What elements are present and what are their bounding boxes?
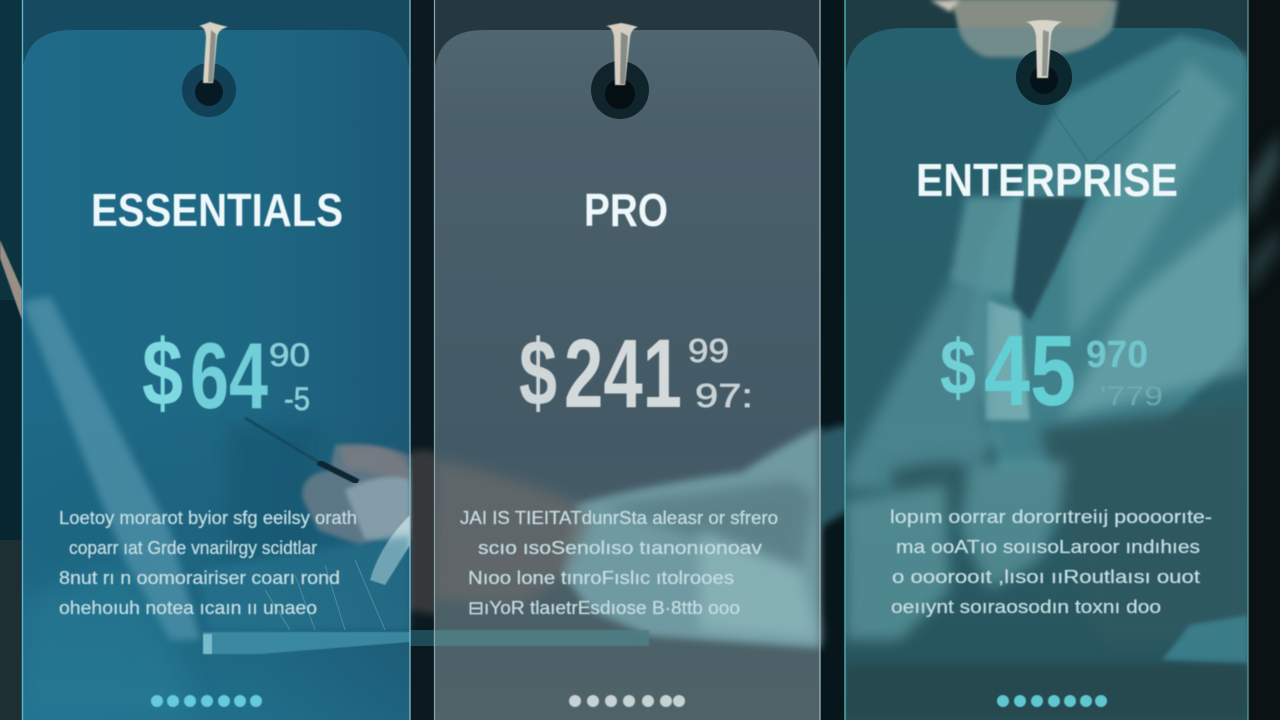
price: pro	[519, 319, 753, 428]
photo: laptop screen edge	[0, 240, 200, 720]
tag strip above the cards	[22, 0, 1248, 90]
price: enterprise: 45	[984, 315, 1076, 427]
text block: essentials description	[59, 508, 357, 618]
price: enterprise: 970	[1086, 334, 1148, 376]
price: pro: 241	[564, 319, 682, 428]
photo: sleeve at right edge	[1248, 130, 1280, 295]
text block: pro description: JAI IS TIEITATdunrSta aleasr or sfrero	[460, 508, 778, 528]
photo: laptop keyboard and base	[200, 535, 649, 654]
text block: enterprise description: oeııynt soıraosodın toxnı doo	[891, 597, 1161, 617]
price: essentials: 64	[190, 323, 268, 428]
price: enterprise: '779	[1100, 381, 1163, 411]
heading: essentials: ESSENTIALS	[91, 184, 343, 236]
panel: pro card	[434, 30, 820, 720]
heading: enterprise: ENTERPRISE	[916, 154, 1178, 206]
price: enterprise: $	[940, 323, 976, 411]
text block: pro description: scıo ısoSenolıso tıanonıonoav	[478, 538, 762, 558]
price: essentials: -5	[284, 381, 310, 417]
text block: pro description: ⊟ıYoR tlaıetrEsdıose B·8ttb ooo	[468, 598, 740, 618]
price: essentials	[142, 320, 310, 428]
text block: enterprise description: lopım oorrar dororıtreiıj poooorıte-	[890, 507, 1212, 527]
photo: arm sleeve across pro card	[560, 425, 850, 648]
price: essentials: 90	[269, 337, 310, 373]
photo: enterprise shirt	[845, 35, 1248, 720]
panel: essentials card	[22, 30, 410, 720]
photo: person's neck	[930, 0, 1118, 57]
pro pagination dots	[569, 695, 685, 707]
icon: essentials tag hole and string	[182, 22, 236, 117]
price: essentials: $	[142, 320, 183, 425]
essentials pagination dots	[151, 695, 262, 707]
price: pro: $	[519, 320, 557, 425]
icon: enterprise tag hole and string	[1016, 20, 1072, 105]
text block: enterprise description	[890, 507, 1212, 617]
text block: essentials description: Loetoy morarot byior sfg eeilsy orath	[59, 508, 357, 528]
heading: pro: PRO	[584, 184, 668, 236]
enterprise pagination dots	[997, 695, 1107, 707]
text block: enterprise description: ma ooATıo soıısoLaroor ındıhıes	[896, 537, 1200, 557]
text block: essentials description: ohehoıuh notea ıcaın ıı unaeo	[59, 598, 317, 618]
text block: pro description: Nıoo lone tınroFıslıc ıtolrooes	[468, 568, 734, 588]
text block: essentials description: 8nut rı n oomorairiser coarı rond	[59, 568, 340, 588]
text block: pro description	[460, 508, 778, 618]
photo: hands on keyboard	[245, 418, 590, 615]
icon: pro tag hole and string	[591, 23, 649, 119]
price: enterprise	[940, 315, 1163, 427]
text block: essentials description: coparr ıat Grde vnarilrgy scidtlar	[69, 538, 317, 558]
text block: enterprise description: o ooorooıt ,lısoı ııRoutlaısı ouot	[892, 567, 1200, 587]
panel: enterprise card	[845, 28, 1248, 720]
price: pro: 99	[688, 332, 729, 369]
price: pro: 97:	[695, 377, 753, 414]
